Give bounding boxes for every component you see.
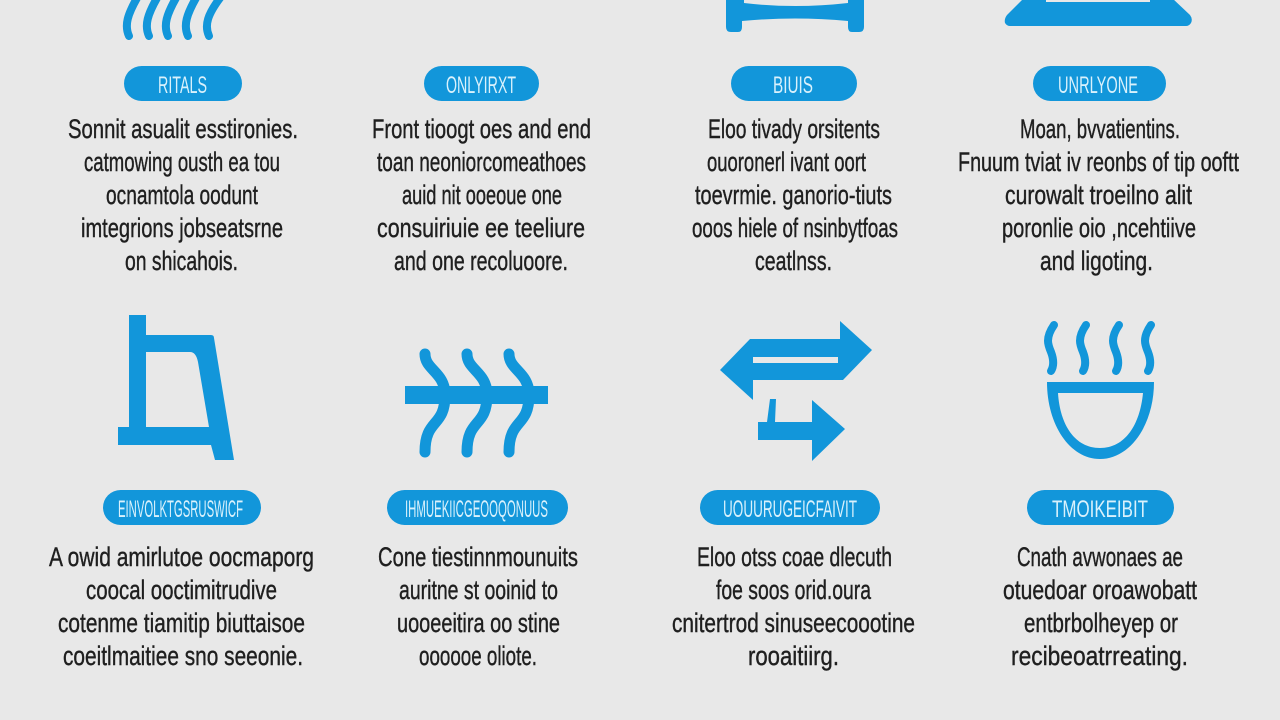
text block: top 4: curowalt troeilno alit	[1005, 180, 1192, 210]
text block: bottom 4: otuedoar oroawobatt	[1003, 575, 1197, 605]
text block: top 3: toevrmie. ganorio-tiuts	[695, 180, 892, 210]
text block: top 3: Eloo tivady orsitents	[708, 114, 880, 144]
badge: top 4: UNRLYONE	[1058, 72, 1138, 99]
text block: top 1: Sonnit asualit esstironies.	[68, 114, 298, 144]
panel: top 3	[692, 0, 898, 276]
badge: bottom 1	[103, 490, 261, 525]
panel: top 4	[958, 0, 1239, 276]
text block: top 1	[68, 114, 298, 276]
text block: bottom 2: oooooe oliote.	[419, 641, 537, 671]
text block: top 2: Front tioogt oes and end	[372, 114, 591, 144]
panel: bottom 2	[378, 354, 578, 671]
text block: bottom 1: A owid amirlutoe oocmaporg	[49, 542, 314, 572]
text block: top 4: Moan, bvvatientins.	[1020, 114, 1180, 144]
text block: bottom 3: rooaitiirg.	[748, 641, 839, 671]
badge: top 4	[1033, 66, 1166, 101]
badge: bottom 3: UOUURUGEICFAIVIT	[723, 496, 857, 523]
text block: top 3: ceatlnss.	[755, 246, 832, 276]
text block: top 4: and ligoting.	[1040, 246, 1153, 276]
panel: bottom 1	[49, 315, 314, 671]
badge: bottom 1: EINVOLKTGSRUSWICF	[118, 496, 243, 523]
icon: trapezoid	[1005, 0, 1192, 26]
icon: exchange arrows	[720, 321, 872, 461]
text block: top 3: ouoronerl ivant oort	[707, 147, 866, 177]
text block: bottom 1	[49, 542, 314, 671]
text block: bottom 4: entbrbolheyep or	[1024, 608, 1178, 638]
badge: bottom 2	[387, 490, 568, 525]
text block: top 4: poronlie oio ,ncehtiive	[1002, 213, 1196, 243]
text block: top 1: on shicahois.	[125, 246, 238, 276]
badge: top 3	[731, 66, 857, 101]
badge: bottom 3	[700, 490, 880, 525]
badge: top 2: ONLYIRXT	[446, 72, 516, 99]
badge: top 1	[124, 66, 242, 101]
text block: bottom 3	[672, 542, 915, 671]
panel: heat waves	[68, 0, 298, 276]
text block: top 2: consuiriuie ee teeliure	[377, 213, 585, 243]
badge: bottom 4: TMOIKEIBIT	[1052, 496, 1148, 523]
text block: bottom 4: recibeoatrreating.	[1011, 641, 1188, 671]
text block: bottom 1: coocal ooctimitrudive	[86, 575, 277, 605]
text block: bottom 3: Eloo otss coae dlecuth	[697, 542, 892, 572]
text block: bottom 2: uooeeitira oo stine	[397, 608, 560, 638]
icon: waves through bar	[405, 354, 548, 452]
text block: bottom 2	[378, 542, 578, 671]
text block: top 3	[692, 114, 898, 276]
text block: bottom 4: Cnath avwonaes ae	[1017, 542, 1183, 572]
badge: bottom 4	[1027, 490, 1174, 525]
text block: top 3: ooos hiele of nsinbytfoas	[692, 213, 898, 243]
text block: bottom 3: foe soos orid.oura	[716, 575, 872, 605]
icon: steaming bowl	[1047, 325, 1154, 459]
text block: top 1: imtegrions jobseatsrne	[81, 213, 283, 243]
text block: top 1: ocnamtola oodunt	[106, 180, 258, 210]
text block: top 1: catmowing ousth ea tou	[84, 147, 280, 177]
panel: bottom 4	[1003, 325, 1197, 671]
text block: bottom 4	[1003, 542, 1197, 671]
icon: bracket frame	[118, 315, 234, 460]
text block: bottom 1: cotenme tiamitip biuttaisoe	[58, 608, 305, 638]
badge: top 1: RITALS	[158, 72, 207, 99]
text block: bottom 2: Cone tiestinnmounuits	[378, 542, 578, 572]
badge: top 3: BIUIS	[773, 72, 813, 99]
text block: top 4	[958, 114, 1239, 276]
text block: top 2: toan neoniorcomeathoes	[377, 147, 586, 177]
badge: bottom 2: IHMUEKIICGEOOQONUUS	[405, 496, 548, 523]
badge: top 2	[424, 66, 539, 101]
text block: bottom 1: coeitlmaitiee sno seeonie.	[63, 641, 303, 671]
panel: top 2	[372, 66, 591, 276]
icon: bench shape	[726, 0, 864, 32]
panel: bottom 3	[672, 321, 915, 671]
icon: heat waves	[127, 0, 220, 36]
text block: top 2: and one recoluoore.	[394, 246, 568, 276]
text block: top 2	[372, 114, 591, 276]
text block: bottom 2: auritne st ooinid to	[399, 575, 558, 605]
text block: top 2: auid nit ooeoue one	[402, 180, 562, 210]
text block: bottom 3: cnitertrod sinuseecoootine	[672, 608, 915, 638]
